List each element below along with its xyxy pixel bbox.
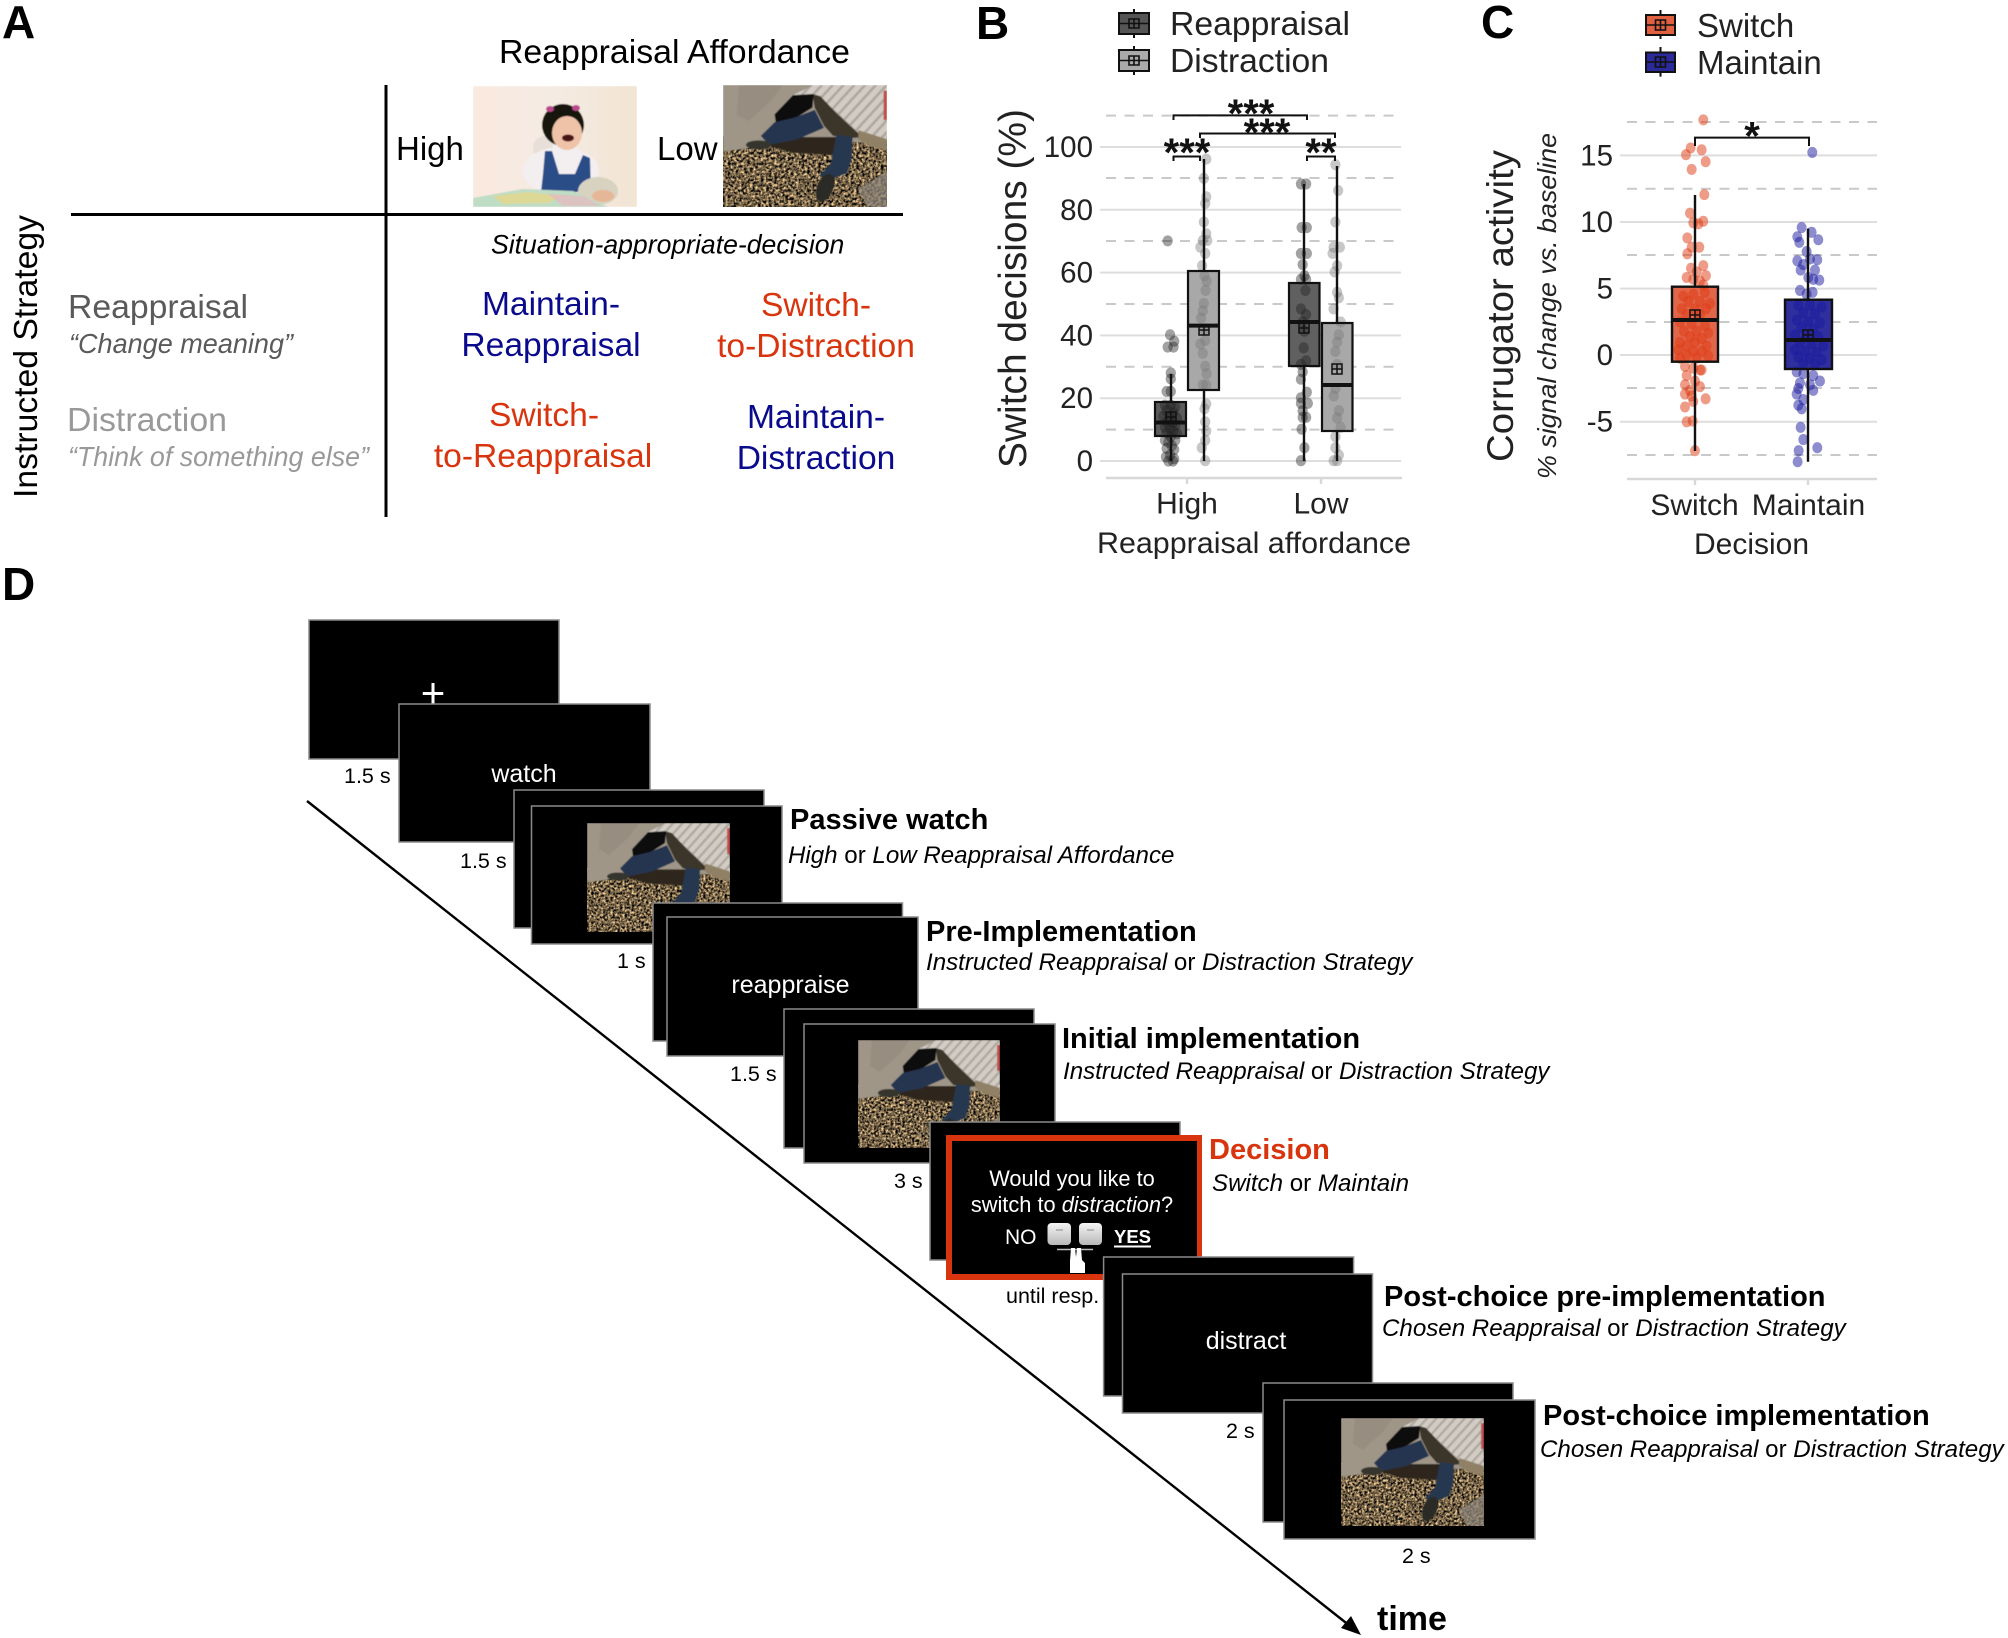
subheading: Situation-appropriate-decision: Situation-appropriate-decision	[491, 230, 844, 260]
step label: Decision: Switch or Maintain	[1212, 1170, 1409, 1197]
significance brackets B: ***	[1164, 131, 1211, 175]
boxplots B	[1155, 159, 1352, 461]
x axis labels B: Reappraisal affordance	[1097, 527, 1411, 560]
row axis title: Instructed Strategy: Instructed Strategy	[7, 215, 44, 498]
cell: Maintain-Distraction: Distraction	[737, 440, 895, 477]
x axis labels B: High	[1156, 488, 1218, 520]
screens: decision prompt: YES	[1114, 1226, 1151, 1247]
durations: 1.5 s	[460, 849, 507, 873]
y axis title B: Switch decisions (%)	[992, 109, 1035, 468]
cell: Switch-to-Distraction: Switch-	[761, 287, 871, 324]
y axis ticks B: 40	[1060, 320, 1093, 352]
y axis ticks B	[1044, 131, 1093, 478]
table axes	[71, 85, 903, 517]
screens: initial implementation image	[784, 1009, 1055, 1163]
time arrow	[307, 801, 1361, 1635]
legend B: Distraction	[1170, 42, 1329, 79]
step label: Decision	[1209, 1134, 1409, 1197]
screens: passive watch image	[514, 790, 782, 944]
significance brackets B: **	[1305, 131, 1337, 175]
significance bracket C	[1695, 114, 1809, 158]
screens: distract cue: distract	[1206, 1327, 1286, 1355]
step label: Pre-Implementation	[926, 916, 1414, 976]
step label: Passive watch	[788, 804, 1174, 869]
x axis labels C	[1650, 489, 1865, 561]
x axis labels B: Low	[1293, 488, 1349, 520]
screen: watch cue	[399, 704, 650, 842]
gridlines B	[1100, 147, 1401, 461]
screens: post-choice implementation image	[1263, 1383, 1535, 1539]
screens: reappraise cue	[653, 903, 918, 1056]
step label: Initial implementation	[1062, 1023, 1551, 1085]
y axis title C: Corrugator activity	[1480, 149, 1521, 462]
panel D: trial timeline	[2, 558, 2006, 1638]
y axis ticks C	[1580, 140, 1613, 438]
y axis ticks B: 100	[1044, 131, 1093, 164]
photo: person under sheet, low affordance	[723, 85, 887, 207]
panel A: reappraisal affordance by instructed strategy table	[2, 0, 915, 517]
x axis labels C: Decision	[1694, 528, 1809, 561]
y axis ticks B: 0	[1077, 445, 1093, 478]
step label: Post-choice pre-implementation: Post-choice pre-implementation	[1384, 1281, 1826, 1313]
y axis ticks C: 5	[1597, 272, 1613, 306]
heading: Reappraisal Affordance: Reappraisal Affordance	[499, 33, 850, 70]
screen: fixation	[309, 620, 559, 759]
step label: Post-choice implementation	[1540, 1400, 2006, 1463]
step label: Pre-Implementation: Pre-Implementation	[926, 916, 1197, 948]
panel C: corrugator activity boxplot	[1480, 0, 1877, 561]
step label: Pre-Implementation: Instructed Reappraisal or Distraction Strategy	[926, 949, 1414, 976]
step label: Decision: Decision	[1209, 1134, 1330, 1166]
icon: arrow keys and hand	[1048, 1223, 1102, 1273]
y axis ticks B: 60	[1060, 256, 1093, 290]
panel B: switch decisions boxplot	[976, 0, 1411, 560]
label: Low: Low	[657, 130, 718, 167]
row sublabel: Think of something else: “Think of something else”	[68, 441, 371, 472]
x axis labels C: Maintain	[1752, 489, 1865, 522]
durations: 1.5 s	[344, 764, 391, 788]
data points maintain	[1790, 147, 1828, 467]
step label: Initial implementation: Instructed Reappraisal or Distraction Strategy	[1063, 1058, 1551, 1085]
screens: decision prompt: NO	[1005, 1226, 1036, 1249]
significance brackets B: ***	[1244, 111, 1291, 155]
gridlines C	[1620, 155, 1877, 422]
box fills B	[1155, 271, 1352, 436]
screens: decision prompt: switch to distraction?	[971, 1192, 1173, 1217]
significance bracket C: *	[1744, 114, 1760, 158]
y axis ticks C: 15	[1580, 140, 1613, 172]
screens: reappraise cue: reappraise	[731, 971, 850, 999]
label: time: time	[1377, 1600, 1447, 1638]
boxplots C	[1672, 195, 1832, 462]
step label: Post-choice pre-implementation: Chosen Reappraisal or Distraction Strategy	[1382, 1315, 1848, 1342]
cell: Switch-to-Distraction: to-Distraction	[717, 328, 915, 365]
x axis labels B	[1097, 488, 1411, 560]
cell: Maintain-Reappraisal: Reappraisal	[461, 327, 641, 364]
screens: decision prompt: Would you like to	[989, 1166, 1155, 1191]
cell: Switch-to-Reappraisal: Switch-	[489, 397, 599, 434]
data points high distraction	[1195, 154, 1212, 466]
significance brackets B: ***	[1228, 92, 1275, 136]
screen: watch cue: watch	[490, 760, 557, 788]
durations: 2 s	[1226, 1419, 1255, 1443]
screens: distract cue	[1104, 1257, 1372, 1413]
photo: crying child, high affordance	[473, 86, 637, 207]
y axis ticks B: 80	[1060, 194, 1093, 227]
screens: decision prompt	[930, 1122, 1202, 1280]
cell: Maintain-Distraction: Maintain-	[747, 399, 885, 436]
durations: 1.5 s	[730, 1062, 777, 1086]
significance brackets B	[1164, 92, 1337, 175]
row label: Reappraisal: Reappraisal	[68, 288, 248, 325]
x axis labels C: Switch	[1650, 489, 1739, 522]
y axis ticks C: -5	[1587, 406, 1613, 438]
screen: fixation: +	[421, 669, 445, 716]
durations: 3 s	[894, 1169, 923, 1193]
legend C: Switch	[1697, 7, 1794, 44]
box fills C	[1672, 287, 1832, 369]
step label: Initial implementation: Initial implementation	[1062, 1023, 1360, 1055]
step label: Post-choice implementation: Post-choice implementation	[1543, 1400, 1930, 1432]
step label: Post-choice implementation: Chosen Reappraisal or Distraction Strategy	[1540, 1436, 2006, 1463]
row sublabel: Change meaning: “Change meaning”	[69, 328, 295, 359]
step label: Passive watch: High or Low Reappraisal Affordance	[788, 842, 1174, 869]
durations: 1 s	[617, 949, 646, 973]
data points switch	[1673, 114, 1715, 456]
durations	[344, 764, 1431, 1568]
durations: until resp.	[1006, 1284, 1099, 1308]
step label: Post-choice pre-implementation	[1382, 1281, 1848, 1342]
legend C	[1646, 7, 1822, 81]
durations: 2 s	[1402, 1544, 1431, 1568]
y axis ticks B: 20	[1060, 382, 1093, 415]
legend B	[1119, 5, 1350, 79]
label: High: High	[396, 130, 464, 167]
y axis ticks C: 0	[1597, 339, 1613, 372]
panel letter D: D	[2, 558, 35, 610]
data points low distraction	[1327, 159, 1346, 466]
cell: Maintain-Reappraisal: Maintain-	[482, 286, 620, 323]
row label: Distraction: Distraction	[67, 401, 227, 438]
legend B: Reappraisal	[1170, 5, 1350, 42]
legend C: Maintain	[1697, 44, 1822, 81]
cell: Switch-to-Reappraisal: to-Reappraisal	[434, 438, 652, 475]
data points low reappraisal	[1296, 178, 1313, 466]
y axis ticks C: 10	[1580, 206, 1613, 239]
y axis subtitle C: % signal change vs. baseline	[1532, 133, 1562, 479]
step label: Passive watch: Passive watch	[790, 804, 988, 836]
data points high reappraisal	[1158, 235, 1182, 467]
